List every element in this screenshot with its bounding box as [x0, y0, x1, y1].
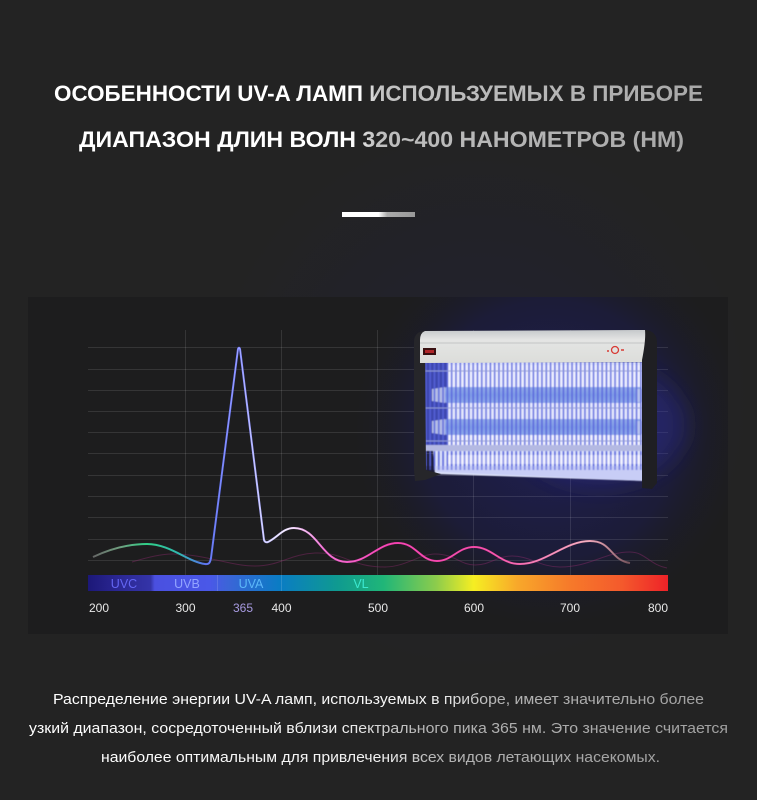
wavelength axis labels: 300 [175, 601, 196, 615]
title rule [342, 212, 415, 217]
lamp right end cap [642, 330, 657, 489]
description text: узкий диапазон, сосредоточенный вблизи спектрального пика 365 нм. Это значение считается [29, 721, 728, 737]
wavelength axis labels: 600 [464, 601, 484, 615]
wavelength axis labels: 800 [648, 601, 668, 615]
wavelength axis labels: 700 [560, 601, 580, 615]
description text: Распределение энергии UV-A ламп, используемых в приборе, имеет значительно более [53, 692, 704, 708]
spectrum bar: UVA [239, 577, 264, 591]
lamp photo illustration [414, 330, 685, 489]
spectrum bar: VL [353, 577, 369, 591]
spectral power curve [93, 348, 630, 564]
wavelength axis labels: 200 [89, 601, 109, 615]
lamp left end cap [414, 331, 441, 481]
wavelength axis labels: 400 [271, 601, 292, 615]
spectrum bar: UVB [174, 577, 200, 591]
spectrum bar [88, 575, 668, 591]
lamp light chamber [424, 362, 646, 481]
wavelength axis labels: 365 [233, 601, 253, 615]
lamp top housing [420, 330, 647, 363]
title: ДИАПАЗОН ДЛИН ВОЛН 320~400 НАНОМЕТРОВ (НМ) [79, 127, 684, 152]
title: ОСОБЕННОСТИ UV-A ЛАМП ИСПОЛЬЗУЕМЫХ В ПРИБОРЕ [54, 81, 703, 106]
description text [29, 692, 728, 766]
secondary curve [132, 552, 667, 568]
chart grid [88, 330, 668, 575]
lamp power switch [423, 348, 436, 355]
wavelength axis labels: 500 [368, 601, 388, 615]
wavelength axis labels [89, 601, 668, 615]
spectrum bar: UVC [111, 577, 137, 591]
lamp logo [607, 346, 624, 354]
title [54, 81, 703, 152]
description text: наиболее оптимальным для привлечения всех видов летающих насекомых. [101, 750, 660, 766]
panel: spectrum chart and lamp [28, 297, 728, 634]
